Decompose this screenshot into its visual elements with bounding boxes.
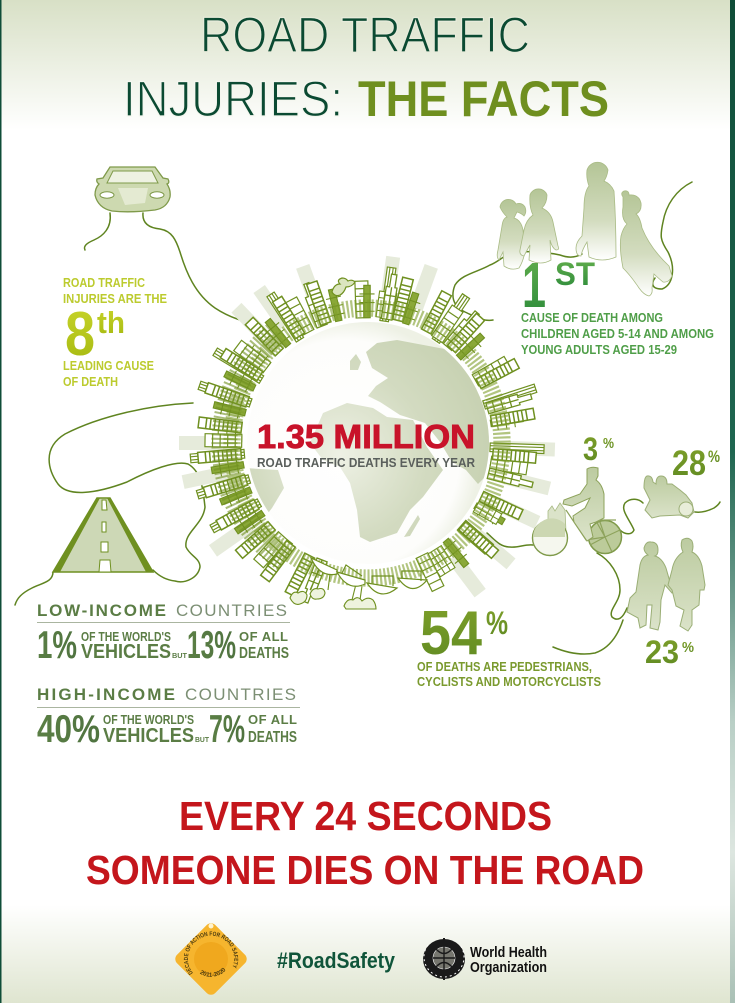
- panel: low-income countries: OF THE WORLD'S: [81, 629, 171, 644]
- icon: decade of action sign: 2011-2020: [200, 968, 226, 977]
- panel: high-income countries: 40%: [37, 708, 100, 751]
- panel: high-income countries: HIGH-INCOME: [37, 685, 175, 704]
- panel: high-income countries: OF ALL: [248, 712, 297, 727]
- icon: car: [95, 167, 170, 212]
- panel: low-income countries: 13%: [187, 624, 236, 667]
- stat: 3 percent cyclists: %: [603, 435, 614, 452]
- title: ROAD TRAFFIC: [200, 7, 530, 63]
- text: 1st cause of death: ST: [555, 256, 595, 292]
- hashtag: #RoadSafety: [277, 948, 396, 973]
- panel: high-income countries: BUT: [195, 737, 210, 744]
- headline: 1.35 million: ROAD TRAFFIC DEATHS EVERY YEAR: [257, 455, 476, 470]
- panel: low-income countries: [37, 601, 290, 667]
- icon: motorcyclists: [644, 476, 694, 518]
- panel: high-income countries: OF THE WORLD'S: [103, 712, 194, 727]
- panel: low-income countries: DEATHS: [239, 645, 289, 662]
- icon: decade of action sign: DECADE OF ACTION FOR ROAD SAFETY: [184, 932, 238, 976]
- city skyline ring: [189, 267, 545, 605]
- panel: high-income countries: COUNTRIES: [185, 685, 296, 704]
- bowls and trees at the globe base: [290, 568, 376, 609]
- stat: 54 percent: 54: [420, 599, 482, 668]
- text: 1st cause of death: [521, 249, 714, 357]
- panel: low-income countries: VEHICLES: [81, 641, 171, 663]
- callout: every 24 seconds: [86, 793, 644, 893]
- text: 8th leading cause: th: [97, 305, 125, 340]
- panel: high-income countries: DEATHS: [248, 729, 297, 746]
- panel: low-income countries: OF ALL: [239, 629, 288, 644]
- city skyline shadow: [179, 256, 555, 597]
- text: 8th leading cause: ROAD TRAFFIC: [63, 276, 145, 290]
- icon: road: [53, 498, 153, 572]
- text: 8th leading cause: LEADING CAUSE: [63, 359, 154, 373]
- panel: high-income countries: VEHICLES: [103, 725, 194, 747]
- panel: low-income countries: LOW-INCOME: [37, 601, 166, 620]
- connecting wires: [15, 182, 720, 654]
- panel: low-income countries: BUT: [172, 653, 188, 660]
- icon: cyclist: [532, 467, 622, 556]
- palm at the top of the skyline: [332, 278, 355, 296]
- globe: [236, 322, 496, 564]
- bowls along the globe edge: [311, 558, 427, 594]
- stat: 54 percent: %: [486, 605, 508, 641]
- icon: decade of action sign: [175, 923, 247, 995]
- text: 1st cause of death: YOUNG ADULTS AGED 15-29: [521, 342, 677, 357]
- stat: 23 percent pedestrians: 23: [645, 634, 679, 670]
- text: 8th leading cause: INJURIES ARE THE: [63, 292, 167, 306]
- stat: 54 percent: CYCLISTS AND MOTORCYCLISTS: [417, 675, 601, 689]
- icon: children and young adults: [497, 162, 672, 296]
- stat: 3 percent cyclists: 3: [583, 431, 598, 467]
- panel: high-income countries: [37, 685, 300, 751]
- text: 1st cause of death: 1: [522, 249, 546, 321]
- logo: world health organization: World Health: [470, 945, 547, 961]
- logo: world health organization: [423, 938, 547, 980]
- title: [123, 7, 609, 127]
- panel: low-income countries: 1%: [37, 624, 77, 667]
- text: 8th leading cause: 8: [65, 300, 95, 369]
- callout: every 24 seconds: EVERY 24 SECONDS: [179, 793, 552, 839]
- logo: world health organization: Organization: [470, 960, 547, 976]
- stat: 23 percent pedestrians: %: [682, 639, 694, 656]
- text: 1st cause of death: CAUSE OF DEATH AMONG: [521, 310, 663, 325]
- title: INJURIES:: [123, 71, 343, 127]
- stat: 3 percent cyclists: [583, 431, 614, 467]
- title: THE FACTS: [358, 71, 609, 127]
- stat: 28 percent motorcyclists: 28: [672, 444, 706, 483]
- headline: 1.35 million: [257, 418, 476, 470]
- panel: low-income countries: COUNTRIES: [176, 601, 287, 620]
- stat: 54 percent: [417, 599, 601, 689]
- icon: pedestrians: [627, 538, 705, 631]
- text: 8th leading cause: OF DEATH: [63, 375, 118, 389]
- panel: high-income countries: 7%: [209, 708, 245, 751]
- stat: 54 percent: OF DEATHS ARE PEDESTRIANS,: [417, 660, 592, 674]
- text: 8th leading cause: [63, 276, 167, 389]
- stat: 28 percent motorcyclists: %: [708, 447, 720, 466]
- headline: 1.35 million: 1.35 MILLION: [257, 418, 475, 455]
- callout: every 24 seconds: SOMEONE DIES ON THE ROAD: [86, 847, 644, 893]
